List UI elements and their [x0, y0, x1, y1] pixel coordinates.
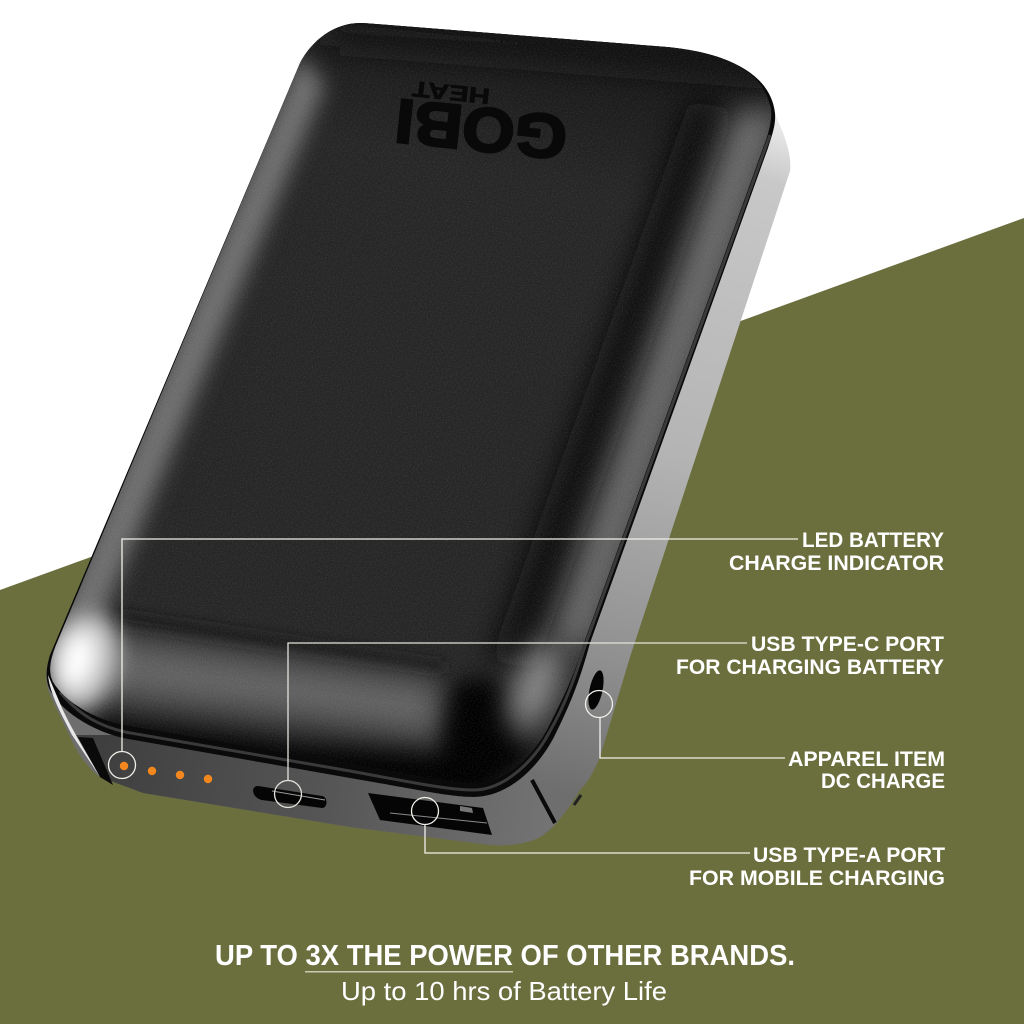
callout: USB type-A port: [412, 798, 945, 890]
background: olive diagonal panel: [0, 218, 1024, 1024]
label: USB-A: USB TYPE-A PORT: [753, 843, 945, 867]
LED indicators: [120, 762, 212, 783]
power bank device: [46, 23, 790, 846]
device side and front shell: [46, 110, 790, 845]
sheen: white corner bloom: [38, 605, 130, 719]
label: USB-C: [676, 632, 944, 679]
small side notch: [574, 795, 581, 805]
sheen: front band: [100, 635, 440, 738]
leader line: LED: [108, 539, 798, 778]
headline underline: [305, 971, 513, 972]
callout: apparel item DC charge: [586, 690, 945, 793]
sheen: black shadow above rim: [100, 680, 545, 800]
leader line: DC: [586, 690, 785, 758]
rim ridge: [60, 135, 770, 790]
label: LED: CHARGE INDICATOR: [729, 551, 944, 575]
callout: LED battery charge indicator: [108, 528, 944, 778]
sheen: dark seam above front band: [118, 612, 445, 674]
label: DC: DC CHARGE: [821, 769, 945, 793]
sheen: left edge band: [40, 55, 325, 670]
headline: UP TO 3X THE POWER OF OTHER BRANDS.: [215, 940, 795, 972]
sheen: top edge shadow: [326, 23, 733, 63]
label: DC: APPAREL ITEM: [788, 747, 945, 771]
USB type-A port: [368, 793, 492, 835]
DC charge jack: [585, 669, 607, 711]
label: USB-A: FOR MOBILE CHARGING: [689, 866, 945, 890]
callout: USB type-C port: [274, 632, 944, 808]
leader line: USB-C: [274, 643, 747, 808]
logo: GOBI HEAT debossed upside down: GOBI: [392, 85, 570, 172]
sheen: right edge band: [550, 110, 785, 650]
subheadline: Up to 10 hrs of Battery Life: [341, 976, 667, 1006]
left edge highlight: [48, 675, 100, 777]
surface grain: [72, 23, 771, 783]
sheen: right corner highlight: [501, 635, 571, 735]
USB type-C port: [253, 786, 326, 808]
label: USB-C: USB TYPE-C PORT: [751, 632, 944, 656]
logo: GOBI HEAT debossed upside down: HEAT: [410, 76, 491, 109]
sheen: white corner highlight: [53, 626, 103, 694]
left corner notch: [78, 737, 113, 785]
label: USB-C: FOR CHARGING BATTERY: [676, 655, 944, 679]
device front face: [72, 735, 558, 845]
case seam: [532, 780, 555, 823]
sheen: right dark band: [490, 100, 735, 670]
rim around top shell: [47, 23, 775, 797]
label: LED: LED BATTERY: [802, 528, 944, 552]
label: DC: [788, 747, 945, 793]
top shell with shading: [50, 23, 772, 783]
label: LED: [729, 528, 944, 575]
leader line: USB-A: [412, 798, 750, 853]
label: USB-A: [689, 843, 945, 890]
